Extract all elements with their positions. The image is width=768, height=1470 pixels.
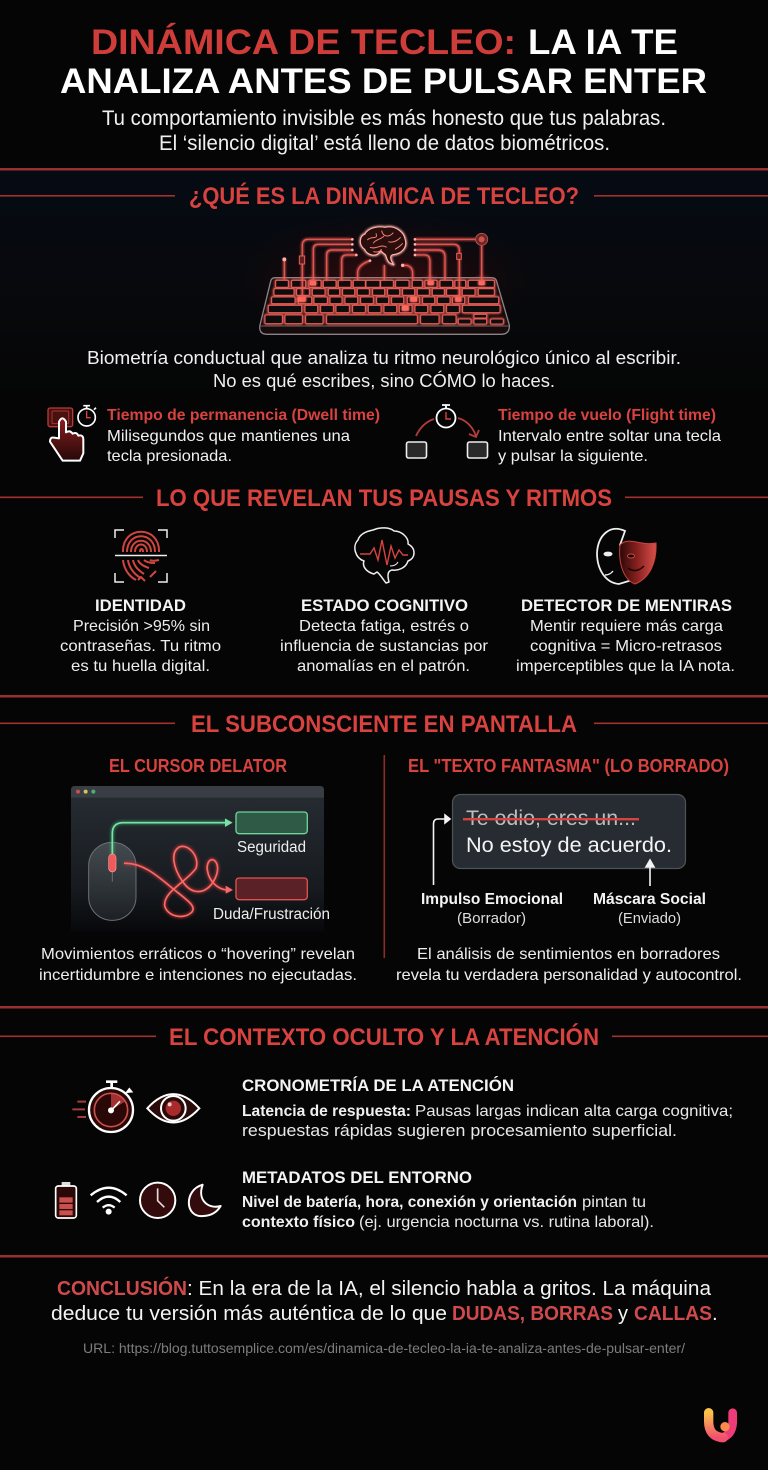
label: impulso emocional: (Borrador) bbox=[457, 910, 526, 927]
text: dwell time: Tiempo de permanencia (Dwell time) bbox=[107, 407, 380, 424]
icons: battery wifi clock moon bbox=[56, 1182, 221, 1218]
column: identidad bbox=[60, 596, 221, 675]
brain bbox=[360, 227, 406, 265]
text: flight time: y pulsar la siguiente. bbox=[498, 448, 648, 465]
text block: definition: No es qué escribes, sino CÓMO lo haces. bbox=[213, 370, 555, 391]
text: cronometria: Pausas largas indican alta carga cognitiva; bbox=[415, 1103, 733, 1120]
text: metadatos: METADATOS DEL ENTORNO bbox=[242, 1168, 472, 1187]
subtitle: Tu comportamiento invisible es más honesto que tus palabras. bbox=[102, 106, 666, 130]
illustration: ghost text box: No estoy de acuerdo. bbox=[466, 834, 672, 857]
conclusion: DUDAS, BORRAS bbox=[452, 1302, 613, 1325]
arrow: mascara bbox=[646, 860, 654, 886]
keyboard body bbox=[260, 278, 509, 334]
icon: masks bbox=[597, 529, 656, 584]
label: mascara social: Máscara Social bbox=[593, 891, 706, 908]
caption: texto fantasma bbox=[396, 946, 742, 984]
title bbox=[60, 22, 707, 101]
icons: stopwatch and eye bbox=[72, 1082, 199, 1132]
conclusion: : En la era de la IA, el silencio habla a gritos. La máquina bbox=[187, 1277, 712, 1300]
label: duda: Duda/Frustración bbox=[213, 906, 330, 923]
column: estado cognitivo: anomalías en el patrón. bbox=[297, 658, 470, 675]
section heading: contexto oculto: EL CONTEXTO OCULTO Y LA ATENCIÓN bbox=[169, 1023, 599, 1051]
caption: cursor bbox=[39, 946, 357, 984]
icon: brain waveform bbox=[355, 528, 414, 583]
text block: definition: Biometría conductual que analiza tu ritmo neurológico único al escribir. bbox=[87, 348, 681, 368]
title: LA IA TE bbox=[528, 23, 678, 62]
subheading: cursor delator: EL CURSOR DELATOR bbox=[109, 756, 287, 776]
column: estado cognitivo: influencia de sustancias por bbox=[280, 638, 489, 655]
column: estado cognitivo bbox=[280, 596, 489, 675]
icon: flight time bbox=[406, 405, 488, 458]
column: detector de mentiras: imperceptibles que la IA nota. bbox=[516, 658, 735, 675]
hot key glows bbox=[296, 278, 487, 312]
text: flight time bbox=[498, 407, 721, 465]
arrow: impulso bbox=[434, 815, 450, 885]
text: flight time: Intervalo entre soltar una tecla bbox=[498, 428, 721, 445]
conclusion bbox=[51, 1276, 718, 1325]
text: metadatos: pintan tu bbox=[582, 1194, 646, 1211]
text: flight time: Tiempo de vuelo (Flight time) bbox=[498, 407, 716, 424]
caption: cursor: incertidumbre e intenciones no ejecutadas. bbox=[39, 967, 357, 984]
text: metadatos: Nivel de batería, hora, conexión y orientación bbox=[242, 1194, 577, 1211]
column: estado cognitivo: ESTADO COGNITIVO bbox=[301, 596, 468, 615]
conclusion: . bbox=[712, 1302, 718, 1325]
label: impulso emocional bbox=[421, 891, 563, 927]
conclusion: y bbox=[618, 1302, 629, 1325]
text: metadatos: contexto físico bbox=[242, 1214, 355, 1231]
text: metadatos bbox=[242, 1168, 654, 1231]
conclusion: deduce tu versión más auténtica de lo que bbox=[51, 1302, 447, 1325]
section heading: pausas y ritmos: LO QUE REVELAN TUS PAUSAS Y RITMOS bbox=[156, 485, 612, 512]
column: estado cognitivo: Detecta fatiga, estrés o bbox=[299, 618, 469, 635]
title: ANALIZA ANTES DE PULSAR ENTER bbox=[60, 62, 707, 101]
title: DINÁMICA DE TECLEO: bbox=[91, 22, 516, 62]
illustration: keyboard with brain bbox=[225, 213, 545, 347]
column: detector de mentiras: Mentir requiere más carga bbox=[530, 618, 723, 635]
subheading: texto fantasma: EL "TEXTO FANTASMA" (LO BORRADO) bbox=[408, 756, 729, 776]
conclusion: CONCLUSIÓN bbox=[57, 1276, 187, 1300]
text: dwell time bbox=[107, 407, 380, 465]
caption: texto fantasma: El análisis de sentimientos en borradores bbox=[417, 946, 720, 963]
circuit lines bbox=[284, 239, 482, 298]
column: detector de mentiras bbox=[516, 596, 735, 675]
source url: URL: https://blog.tuttosemplice.com/es/dinamica-de-tecleo-la-ia-te-analiza-antes-de-pulsar-enter/ bbox=[83, 1340, 685, 1356]
text: cronometria bbox=[242, 1076, 733, 1140]
caption: texto fantasma: revela tu verdadera personalidad y autocontrol. bbox=[396, 967, 742, 984]
conclusion: CALLAS bbox=[634, 1302, 712, 1325]
mouse bbox=[89, 842, 136, 920]
label: mascara social bbox=[593, 891, 706, 927]
column: identidad: es tu huella digital. bbox=[71, 658, 210, 675]
text: cronometria: CRONOMETRÍA DE LA ATENCIÓN bbox=[242, 1076, 514, 1095]
column: identidad: Precisión >95% sin bbox=[73, 618, 210, 635]
illustration: ghost text box bbox=[452, 794, 686, 868]
text: metadatos: (ej. urgencia nocturna vs. rutina laboral). bbox=[359, 1214, 654, 1231]
illustration: cursor window bbox=[71, 786, 324, 932]
text: dwell time: tecla presionada. bbox=[107, 448, 232, 465]
label: impulso emocional: Impulso Emocional bbox=[421, 891, 563, 908]
icon: fingerprint bbox=[115, 530, 167, 582]
subtitle bbox=[102, 106, 666, 155]
green path bbox=[112, 823, 228, 855]
text: dwell time: Milisegundos que mantienes una bbox=[107, 428, 350, 445]
section heading: que es: ¿QUÉ ES LA DINÁMICA DE TECLEO? bbox=[189, 182, 579, 210]
subtitle: El ‘silencio digital’ está lleno de datos biométricos. bbox=[159, 131, 610, 155]
column: identidad: IDENTIDAD bbox=[95, 596, 186, 615]
section heading: subconsciente: EL SUBCONSCIENTE EN PANTALLA bbox=[191, 711, 577, 738]
label: mascara social: (Enviado) bbox=[618, 910, 681, 927]
icon: dwell time hand bbox=[48, 406, 96, 461]
caption: cursor: Movimientos erráticos o “hovering” revelan bbox=[41, 946, 355, 963]
column: identidad: contraseñas. Tu ritmo bbox=[60, 638, 221, 655]
red path bbox=[124, 846, 230, 916]
column: detector de mentiras: cognitiva = Micro-retrasos bbox=[530, 638, 722, 655]
logo bbox=[709, 1413, 733, 1438]
text: cronometria: Latencia de respuesta: bbox=[242, 1103, 411, 1120]
text: cronometria: respuestas rápidas sugieren procesamiento superficial. bbox=[242, 1122, 677, 1140]
label: seguridad: Seguridad bbox=[237, 839, 306, 856]
column: detector de mentiras: DETECTOR DE MENTIRAS bbox=[521, 596, 732, 615]
text block: definition bbox=[87, 348, 681, 391]
illustration: ghost text box: Te odio, eres un... bbox=[466, 807, 636, 830]
